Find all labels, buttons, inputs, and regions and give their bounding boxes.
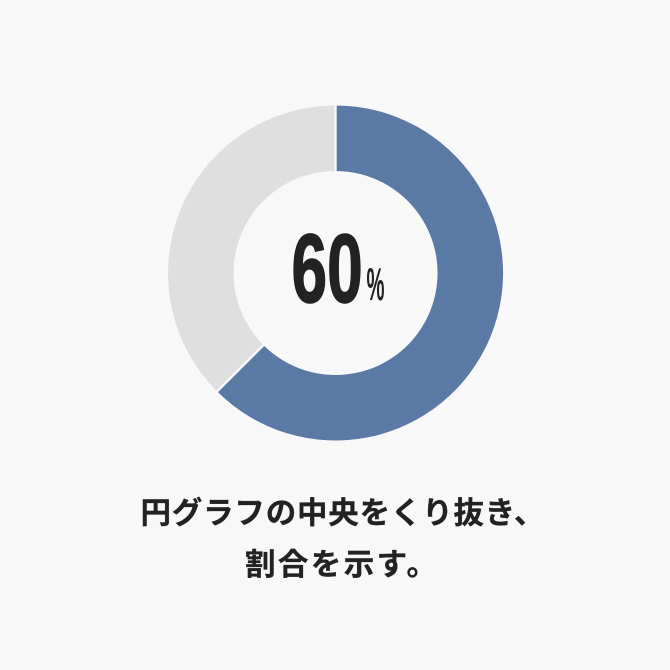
donut chart — [168, 105, 503, 441]
caption line 2: 割合を示す。 — [245, 548, 439, 582]
segment: 60% (blue) — [217, 105, 503, 441]
number 60: 60 — [292, 216, 363, 323]
caption — [140, 496, 545, 582]
center value: 60% — [292, 216, 384, 323]
caption line 1: 円グラフの中央をくり抜き、 — [140, 496, 545, 530]
percent sign: % — [366, 259, 384, 310]
segment: remainder (grey) — [168, 106, 336, 391]
